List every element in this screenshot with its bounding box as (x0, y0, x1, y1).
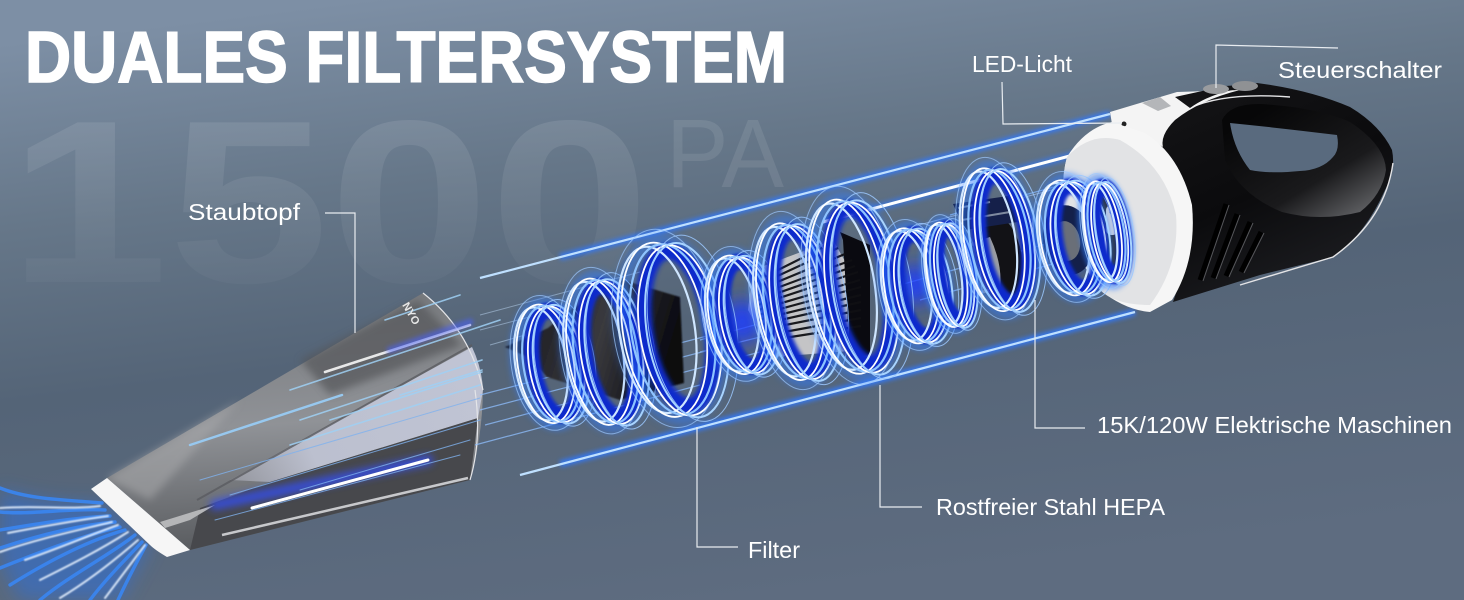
white edge of shell (1190, 96, 1393, 285)
inner cyclone cone (505, 280, 684, 400)
ghost number 1500 PA: 1500 (8, 73, 650, 332)
handheld motor body (1037, 81, 1393, 312)
label: Steuerschalter (1216, 45, 1442, 88)
nozzle tip (91, 478, 190, 557)
handle grip highlight (1222, 104, 1386, 217)
ghost number 1500 PA (8, 73, 784, 332)
label: LED-Licht: LED-Licht (972, 51, 1073, 77)
label: Filter: Filter (748, 537, 800, 563)
hepa filter pleats (748, 232, 870, 358)
label: 15K/120W Elektrische Maschinen (1035, 300, 1452, 438)
label: LED-Licht (972, 51, 1122, 124)
ghost number 1500 PA: PA (666, 99, 784, 208)
label: Filter (697, 427, 800, 563)
streaks through tube (475, 172, 1110, 445)
collar inner face (1063, 138, 1176, 305)
control buttons (1203, 84, 1229, 94)
handle opening (1230, 123, 1338, 172)
black shell (1150, 83, 1393, 302)
label: Staubtopf (188, 199, 355, 333)
motor assembly (953, 195, 1029, 303)
vent slots (1200, 204, 1264, 281)
release button (1142, 97, 1171, 111)
air intake jets (0, 488, 150, 600)
display panel (1175, 84, 1258, 108)
label: 15K/120W Elektrische Maschinen: 15K/120W Elektrische Maschinen (1097, 412, 1452, 438)
dust cup (107, 293, 500, 550)
blue energy centres (722, 210, 1085, 344)
tube: air channel glow lines (480, 114, 1135, 475)
label: Staubtopf: Staubtopf (188, 199, 301, 225)
fan and bearing (1037, 201, 1099, 279)
white collar (1063, 122, 1193, 312)
label: Rostfreier Stahl HEPA (880, 385, 1166, 520)
led (1122, 122, 1126, 126)
white top plate (1110, 90, 1240, 147)
energy rings (501, 150, 1142, 440)
label: Rostfreier Stahl HEPA: Rostfreier Stahl HEPA (936, 494, 1166, 520)
label: Steuerschalter: Steuerschalter (1278, 57, 1442, 83)
title: DUALES FILTERSYSTEM (25, 18, 787, 98)
dust cup: NYO (399, 300, 422, 328)
